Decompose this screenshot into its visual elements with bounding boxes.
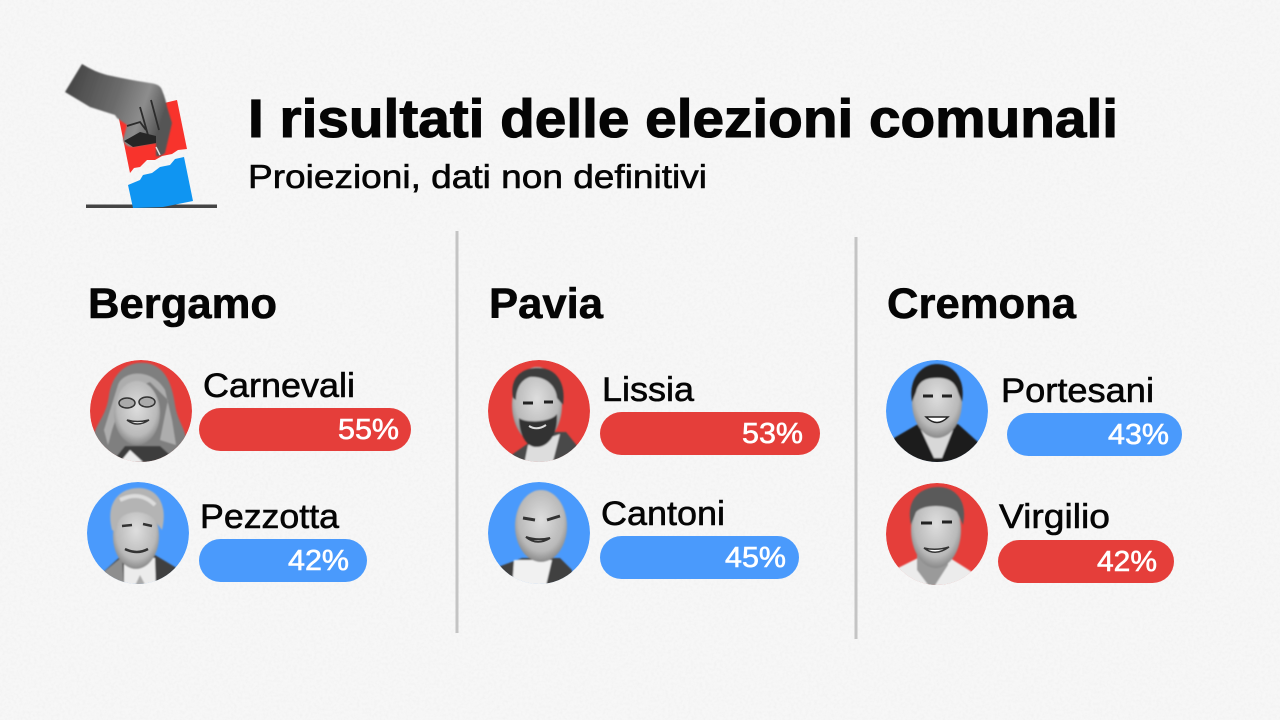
value: 53%: 53% (742, 418, 803, 450)
portrait: Cantoni (488, 482, 590, 590)
value: 45%: 45% (725, 542, 786, 574)
portrait: Lissia (488, 360, 590, 470)
label: Lissia: Lissia (602, 371, 694, 409)
label: Portesani: Portesani (1001, 372, 1154, 410)
panel: Cremona (886, 280, 1182, 590)
panel: Bergamo (87, 280, 411, 590)
bar: Pezzotta 42% (199, 539, 367, 582)
value: 55%: 55% (338, 414, 399, 446)
title: I risultati delle elezioni comunali (248, 89, 1118, 149)
label: Carnevali: Carnevali (203, 367, 355, 405)
bar: Carnevali 55% (199, 408, 411, 451)
bar: Portesani 43% (1007, 413, 1182, 456)
heading: Cremona: Cremona (887, 280, 1077, 328)
bar: Virgilio 42% (998, 540, 1174, 583)
portrait: Virgilio (886, 483, 988, 590)
portrait: Pezzotta (87, 482, 189, 590)
bar: Lissia 53% (600, 412, 820, 455)
label: Cantoni: Cantoni (601, 495, 725, 533)
panel: Pavia (488, 280, 820, 590)
label: Pezzotta: Pezzotta (200, 498, 339, 536)
heading: Pavia: Pavia (489, 280, 604, 328)
value: 42%: 42% (1097, 546, 1157, 578)
value: 42%: 42% (288, 545, 349, 577)
value: 43%: 43% (1108, 419, 1169, 451)
subtitle: Proiezioni, dati non definitivi (248, 158, 707, 195)
portrait: Carnevali (90, 360, 192, 470)
icon: hand dropping ballot into slot (65, 64, 217, 208)
portrait: Portesani (886, 360, 988, 470)
label: Virgilio: Virgilio (999, 498, 1110, 536)
bar: Cantoni 45% (600, 536, 799, 579)
heading: Bergamo: Bergamo (88, 280, 277, 328)
